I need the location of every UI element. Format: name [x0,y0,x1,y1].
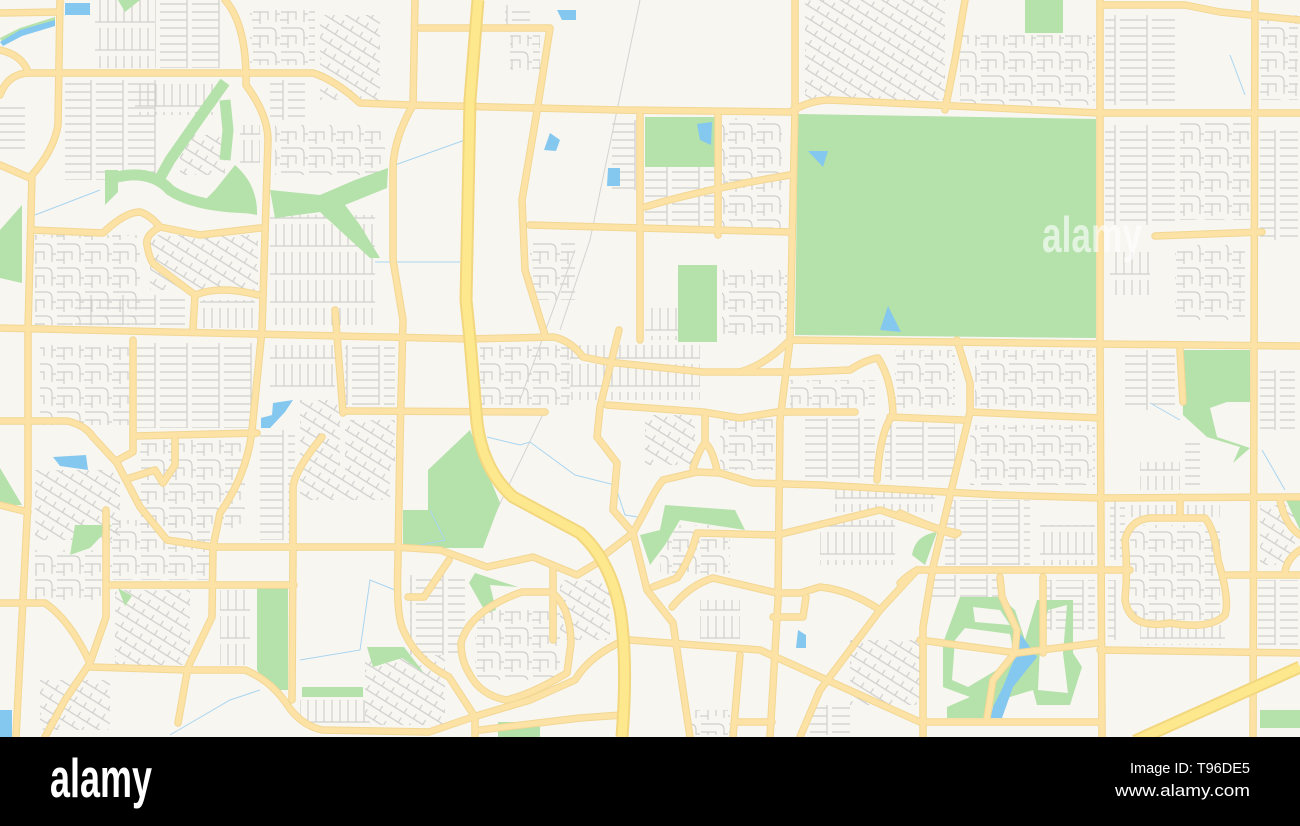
park: golf course [105,82,257,215]
watermark: alamy [1042,207,1142,263]
park: large central reserve [795,114,1096,338]
motorways [466,0,1300,741]
image id: Image ID: T96DE5 [1130,760,1250,777]
website: www.alamy.com [1114,781,1250,800]
footer bar [0,737,1300,826]
footer logo: alamy [50,747,152,809]
park: southeast water gardens [943,597,1082,718]
